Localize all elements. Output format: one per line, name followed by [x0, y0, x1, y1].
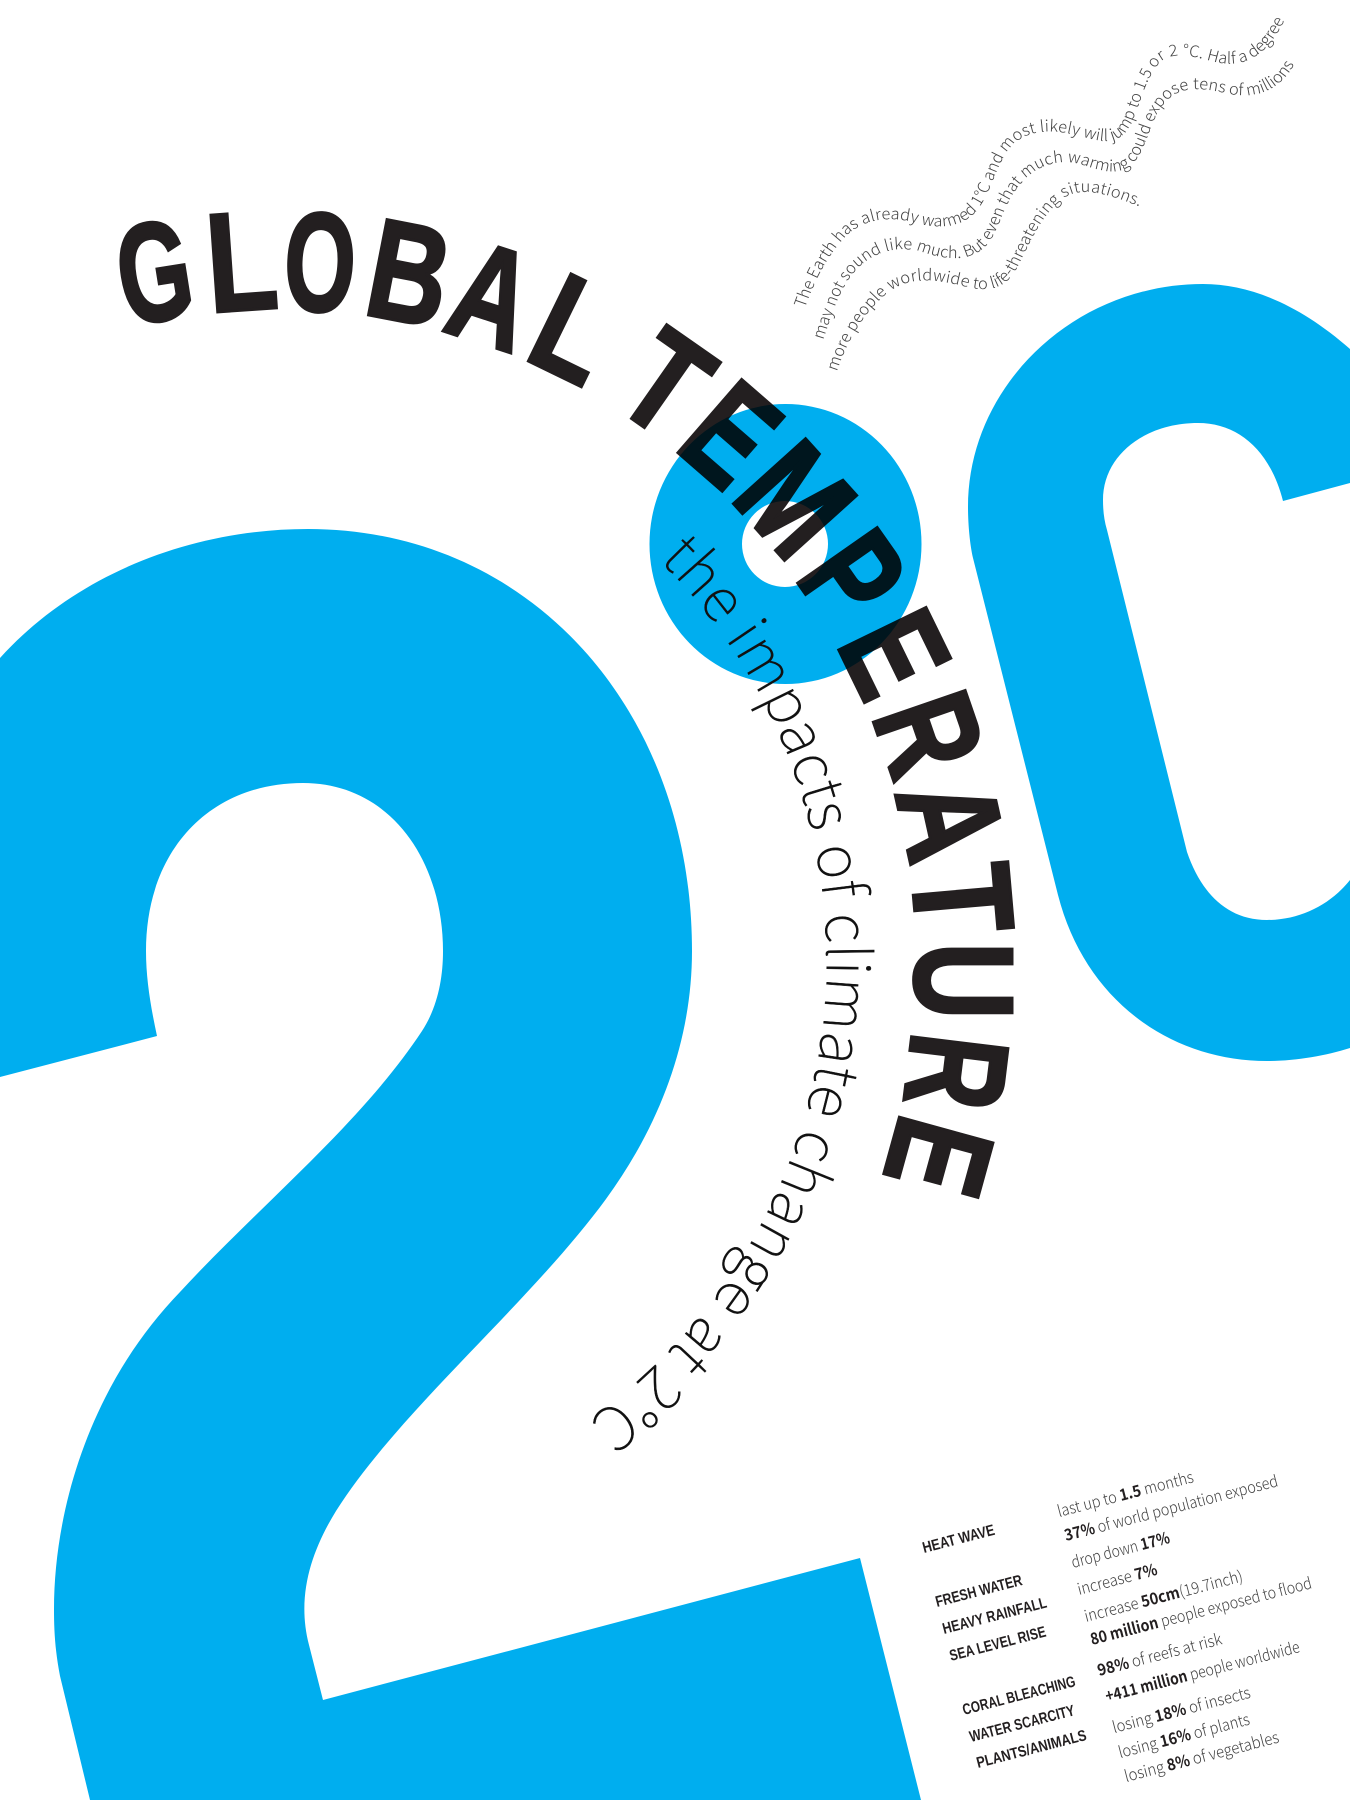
table row values: last up to 1.5 months — [1054, 1464, 1196, 1522]
table row values: losing 8% of vegetables — [1121, 1724, 1281, 1787]
title: GLOBAL TEMPERATURE on arc: A — [431, 209, 553, 383]
table row values — [1054, 1464, 1314, 1787]
table row labels — [921, 1522, 1088, 1772]
table row values: drop down 17% — [1068, 1524, 1172, 1573]
table row values: losing 16% of plants — [1115, 1706, 1252, 1763]
title: GLOBAL TEMPERATURE on arc: E — [808, 588, 980, 720]
intro line 3: more people worldwide to life-threatening situations. — [829, 182, 1139, 370]
table row values: 80 million people exposed to flood — [1087, 1570, 1314, 1650]
table row labels: HEAVY RAINFALL — [941, 1595, 1049, 1638]
title: GLOBAL TEMPERATURE on arc: T — [592, 299, 739, 468]
title: GLOBAL TEMPERATURE on arc: G — [106, 189, 203, 356]
impacts table — [921, 1464, 1314, 1787]
title: GLOBAL TEMPERATURE on arc: A — [865, 765, 1036, 874]
title: GLOBAL TEMPERATURE on arc: L — [508, 244, 640, 416]
big numeral 2 — [0, 529, 921, 1800]
title: GLOBAL TEMPERATURE on arc: E — [652, 352, 809, 517]
title: GLOBAL TEMPERATURE on arc: B — [355, 189, 463, 358]
intro line 2: may not sound like much. But even that much warming could expose tens of millions — [815, 61, 1294, 338]
table row labels: SEA LEVEL RISE — [948, 1624, 1048, 1665]
table row labels: WATER SCARCITY — [968, 1702, 1077, 1746]
intro line 1: The Earth has already warmed 1°C and most likely will jump to 1.5 or 2 °C. Half a degree — [794, 18, 1284, 304]
table row labels: FRESH WATER — [934, 1572, 1024, 1611]
title: GLOBAL TEMPERATURE on arc: L — [201, 181, 282, 343]
table row values: 37% of world population exposed — [1061, 1468, 1280, 1546]
title: GLOBAL TEMPERATURE on arc: P — [768, 505, 936, 651]
title: GLOBAL TEMPERATURE on arc: E — [853, 1102, 1024, 1212]
table row values: 98% of reefs at risk — [1094, 1625, 1225, 1681]
table row values: losing 18% of insects — [1109, 1679, 1253, 1738]
title: GLOBAL TEMPERATURE on arc: R — [842, 674, 1014, 795]
table row labels: PLANTS/ANIMALS — [975, 1727, 1088, 1772]
title: GLOBAL TEMPERATURE on arc: T — [880, 858, 1044, 940]
big letter C — [968, 284, 1350, 1061]
table row labels: HEAT WAVE — [921, 1522, 997, 1557]
table row values: increase 7% — [1074, 1556, 1160, 1600]
degree symbol ring — [650, 404, 922, 684]
title: GLOBAL TEMPERATURE on arc — [106, 181, 1044, 1212]
title: GLOBAL TEMPERATURE on arc: U — [885, 942, 1042, 1020]
title: GLOBAL TEMPERATURE on arc: M — [706, 413, 884, 586]
table row labels: CORAL BLEACHING — [961, 1673, 1077, 1719]
subtitle on arc: the impacts of climate change at 2°C — [593, 536, 874, 1450]
table row values: +411 million people worldwide — [1102, 1634, 1302, 1707]
title: GLOBAL TEMPERATURE on arc: R — [873, 1026, 1038, 1118]
title: GLOBAL TEMPERATURE on arc: O — [281, 183, 359, 343]
table row values: increase 50cm(19.7inch) — [1081, 1563, 1245, 1627]
wavy intro paragraph — [794, 18, 1294, 370]
